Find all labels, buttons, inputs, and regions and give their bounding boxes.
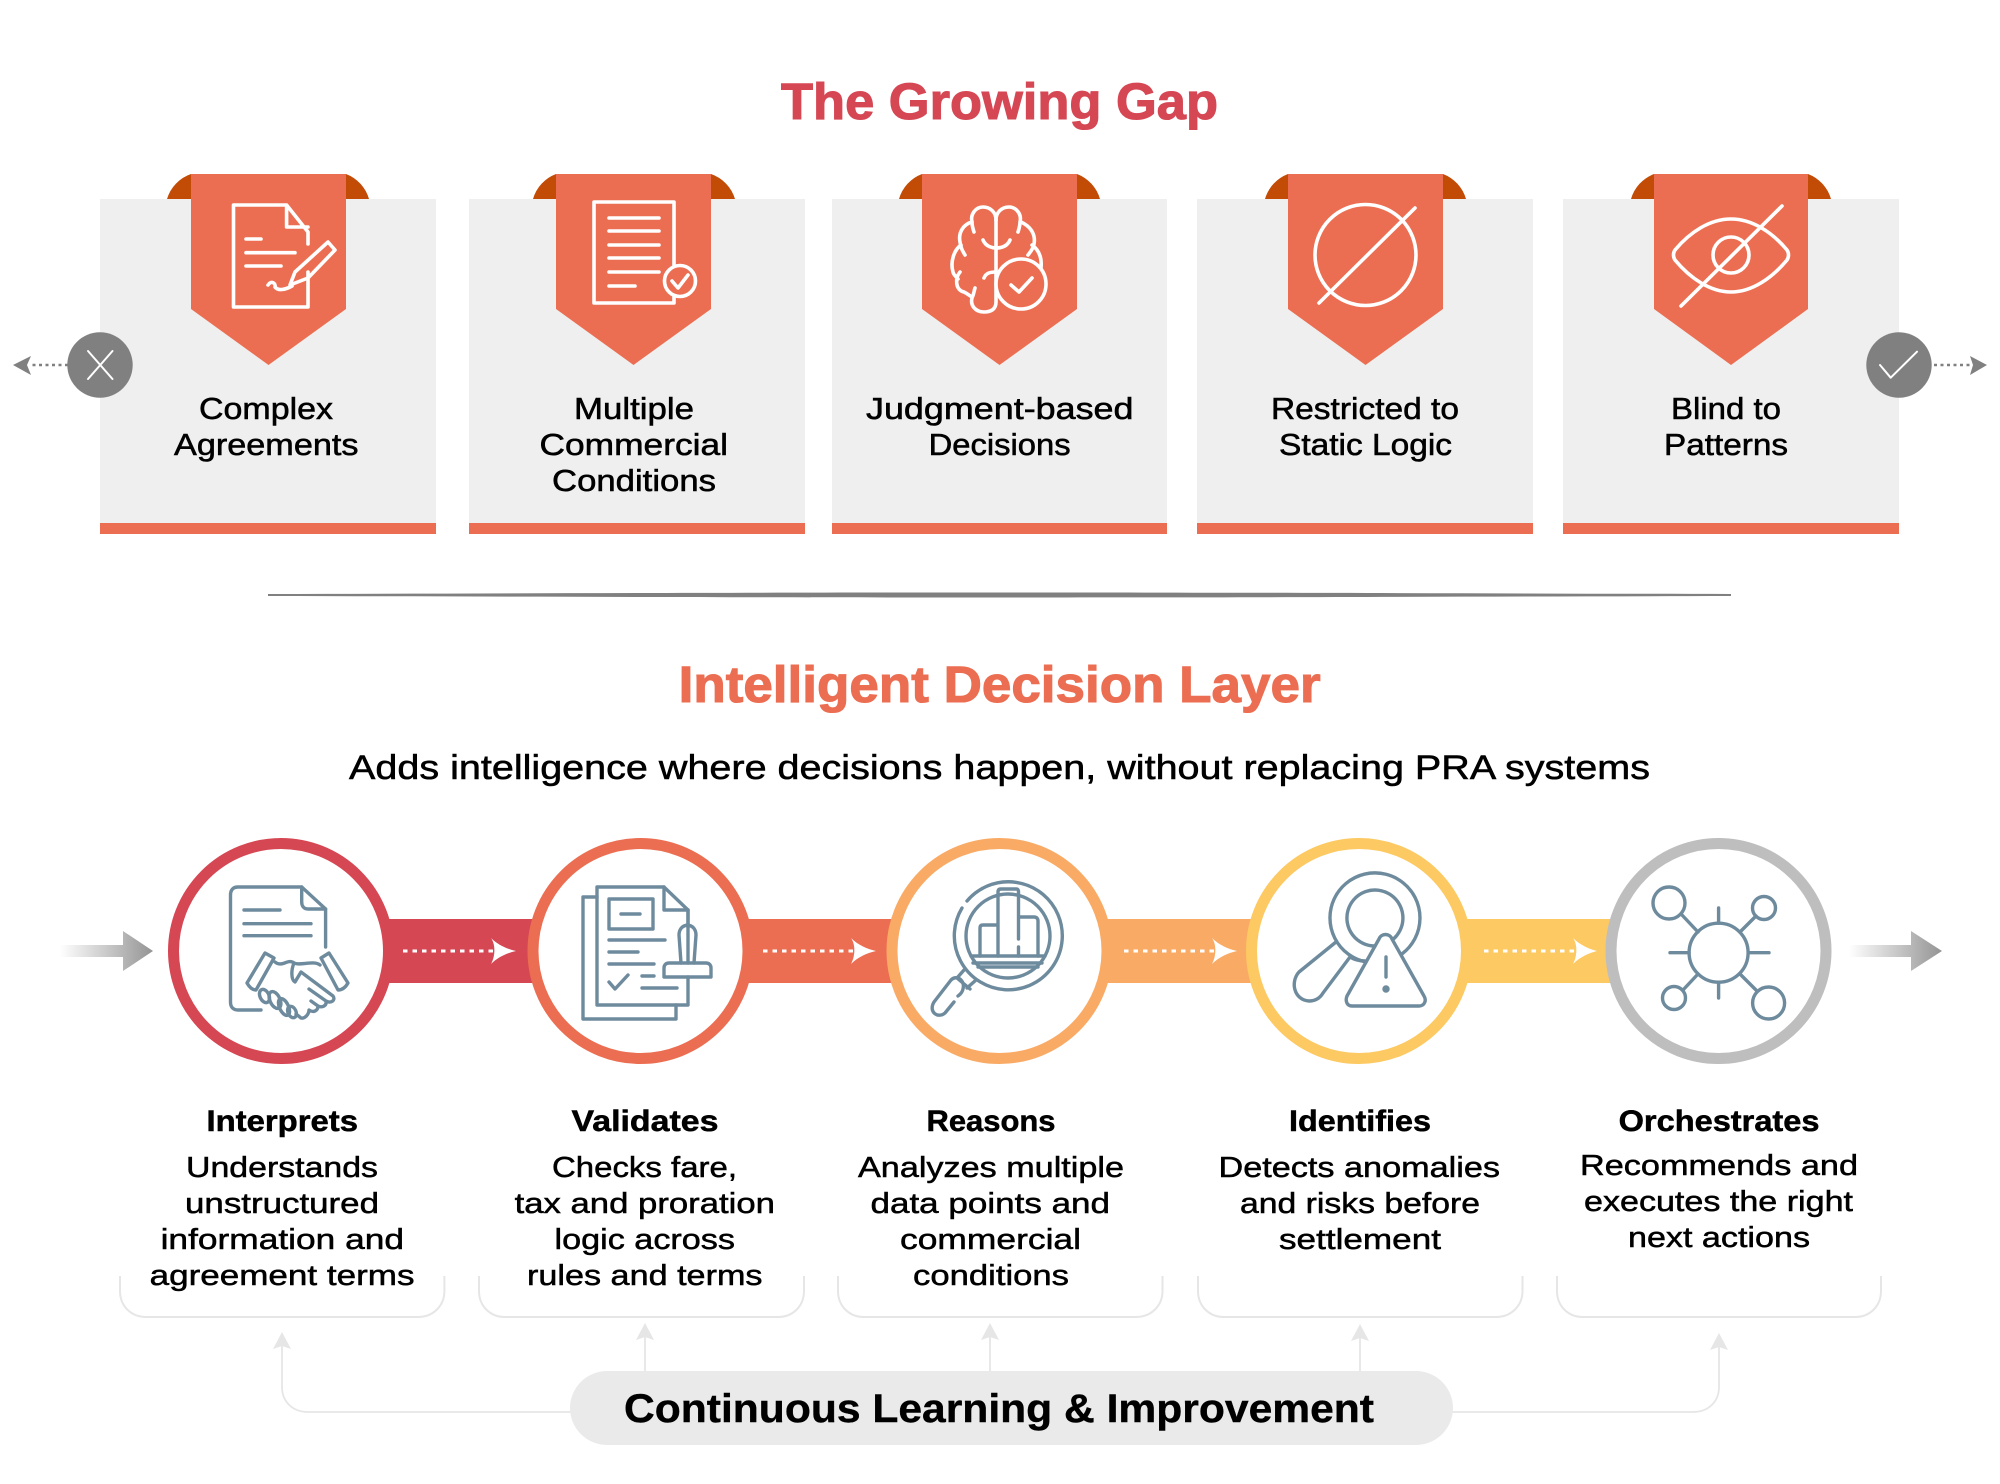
step text: Reasons: Analyzes multiple — [858, 1152, 1124, 1184]
step text: Identifies — [1218, 1105, 1500, 1256]
label: Commercial — [540, 428, 728, 462]
label — [1271, 392, 1459, 462]
ribbon — [533, 174, 735, 365]
step text: Interprets: Interprets — [206, 1105, 358, 1138]
ribbon — [167, 174, 369, 365]
step text: Reasons: data points and — [870, 1188, 1110, 1220]
step text: Reasons: conditions — [913, 1260, 1069, 1292]
step text: Reasons: commercial — [900, 1224, 1081, 1256]
step text: Identifies: Identifies — [1289, 1105, 1431, 1138]
connector 2 — [740, 919, 900, 983]
step circle: Identifies — [1252, 844, 1466, 1058]
label: Agreements — [174, 428, 358, 462]
heading: Intelligent Decision Layer: Intelligent Decision Layer — [679, 656, 1321, 713]
arrow: flow in — [60, 931, 153, 971]
step text: Identifies: Detects anomalies — [1218, 1152, 1500, 1184]
panel: Multiple Commercial Conditions — [469, 174, 805, 534]
step text: Interprets: information and — [161, 1224, 404, 1256]
subtitle: Adds intelligence where decisions happen, without replacing PRA systems — [349, 749, 1650, 787]
step text: Validates: Checks fare, — [552, 1152, 737, 1184]
step circle: Interprets — [174, 844, 388, 1058]
label: Conditions — [552, 464, 716, 498]
process flow — [60, 844, 1942, 1058]
icon: network hub — [1653, 887, 1785, 1019]
ribbon — [899, 174, 1100, 365]
step text: Orchestrates: executes the right — [1584, 1186, 1853, 1218]
step brackets — [120, 1276, 1881, 1317]
feedback arrows — [273, 1323, 1728, 1412]
step text: Validates — [515, 1105, 775, 1292]
label: Static Logic — [1279, 428, 1452, 462]
step circle: Orchestrates — [1611, 844, 1826, 1058]
connector 3 — [1100, 919, 1260, 983]
panel: Complex Agreements — [100, 174, 436, 534]
step text: Validates: rules and terms — [527, 1260, 762, 1292]
step circle: Reasons — [892, 844, 1107, 1058]
label: Patterns — [1664, 428, 1788, 462]
step text: Orchestrates: Recommends and — [1580, 1150, 1858, 1182]
ribbon — [1631, 174, 1831, 365]
panel: Judgment-based Decisions — [832, 174, 1167, 534]
step text: Interprets — [150, 1105, 414, 1292]
icon: magnifier with warning — [1294, 873, 1425, 1006]
label: Blind to — [1671, 392, 1781, 426]
icon: empty set — [1315, 204, 1416, 306]
ribbon — [1265, 174, 1466, 365]
step text: Orchestrates: next actions — [1628, 1222, 1810, 1254]
label: Restricted to — [1271, 392, 1459, 426]
icon: stamped documents — [583, 887, 711, 1019]
step text: Validates: tax and proration — [515, 1188, 775, 1220]
arrow: flow out — [1849, 931, 1942, 971]
connector 1 — [380, 919, 540, 983]
icon: brain with check — [952, 207, 1046, 312]
section divider — [268, 592, 1731, 598]
label — [174, 392, 358, 462]
step text: Identifies: settlement — [1279, 1224, 1441, 1256]
step circle: Validates — [533, 844, 748, 1058]
icon: crossed eye — [1674, 206, 1788, 306]
pill: Continuous Learning & Improvement — [570, 1371, 1453, 1445]
step text: Interprets: unstructured — [185, 1188, 379, 1220]
step text: Orchestrates — [1580, 1105, 1858, 1254]
label — [540, 392, 728, 498]
icon: magnifier over bars — [932, 882, 1062, 1015]
label: Judgment-based — [866, 392, 1134, 426]
step text: Reasons — [858, 1105, 1124, 1292]
label — [1664, 392, 1788, 462]
step text: Identifies: and risks before — [1240, 1188, 1480, 1220]
step text: Validates: logic across — [554, 1224, 735, 1256]
icon: cross badge with arrow — [13, 332, 133, 398]
title: The Growing Gap: The Growing Gap — [781, 73, 1218, 130]
pill: Continuous Learning & Improvement: Continuous Learning & Improvement — [624, 1387, 1374, 1431]
label: Multiple — [574, 392, 694, 426]
connector 4 — [1460, 919, 1620, 983]
label — [866, 392, 1134, 462]
step text: Interprets: Understands — [186, 1152, 378, 1184]
icon: signed document — [234, 205, 335, 307]
panel: Restricted to Static Logic — [1197, 174, 1533, 534]
panel: Blind to Patterns — [1563, 174, 1899, 534]
icon: checklist document — [594, 202, 696, 303]
step text: Validates: Validates — [572, 1105, 718, 1138]
icon: agreement handshake — [230, 887, 348, 1019]
step text: Reasons: Reasons — [926, 1105, 1056, 1138]
step text: Interprets: agreement terms — [150, 1260, 414, 1292]
step text: Orchestrates: Orchestrates — [1619, 1105, 1820, 1138]
label: Decisions — [929, 428, 1071, 462]
label: Complex — [199, 392, 333, 426]
icon: check badge with arrow — [1866, 332, 1987, 398]
